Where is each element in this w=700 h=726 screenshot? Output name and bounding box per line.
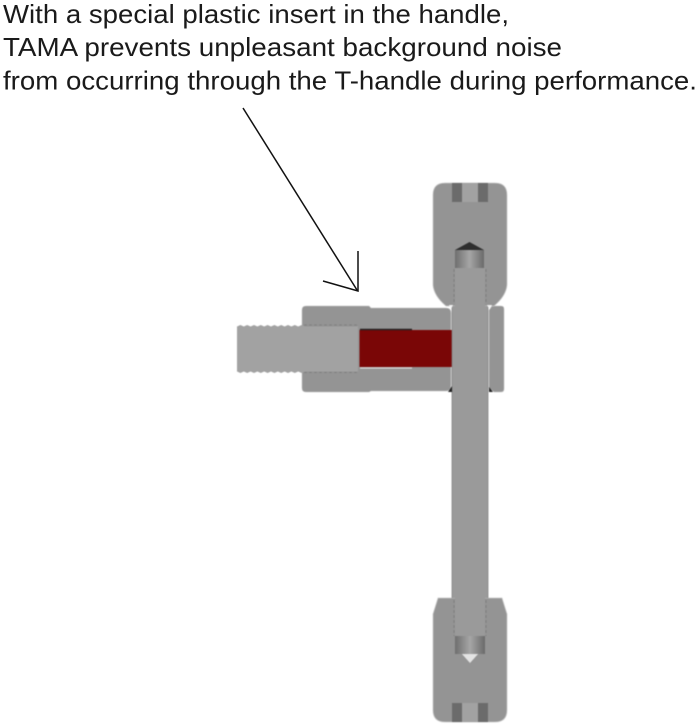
top slots (452, 183, 488, 202)
thread join shading (304, 325, 358, 372)
threaded stud (237, 325, 358, 373)
handle body (302, 306, 451, 392)
caption text: TAMA prevents unpleasant background noise (3, 32, 562, 62)
T-handle cross-section (237, 183, 507, 722)
arrow pointing to plastic insert (243, 108, 358, 291)
bottom pin tip (461, 653, 479, 663)
bottom slots (452, 703, 488, 722)
plastic insert, red (360, 330, 452, 368)
top cap (433, 183, 507, 306)
bottom cap (433, 598, 507, 722)
top pin tip (455, 242, 484, 250)
vertical shaft (448, 268, 493, 636)
caption text (3, 0, 697, 96)
right collar (489, 306, 504, 392)
caption text: from occurring through the T-handle during performance. (3, 66, 697, 96)
